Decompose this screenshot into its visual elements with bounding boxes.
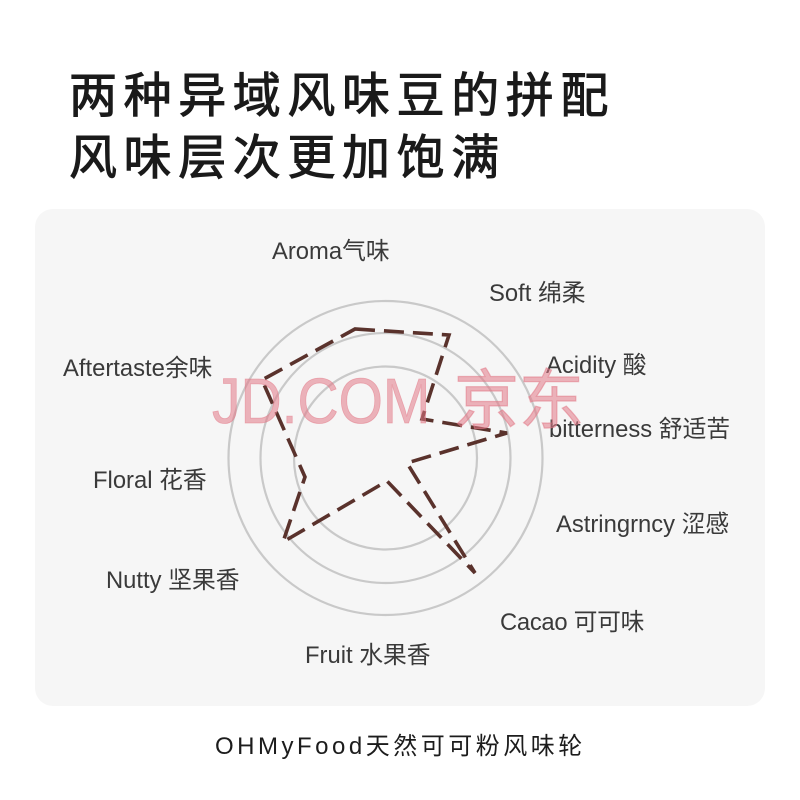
label: Nutty: Nutty 坚果香 [106, 567, 240, 594]
label: Cacao: Cacao 可可味 [500, 609, 644, 636]
label: Acidity: Acidity 酸 [546, 352, 646, 379]
label: Floral: Floral 花香 [93, 467, 207, 494]
title [69, 70, 615, 185]
panel: flavour wheel [35, 209, 765, 706]
watermark: JD.COM [212, 365, 430, 437]
title: 风味层次更加饱满 [69, 132, 506, 185]
watermark: 京东 [454, 364, 584, 437]
concentric rings [228, 301, 542, 615]
label: Aroma: Aroma气味 [272, 238, 390, 265]
label: Soft: Soft 绵柔 [489, 280, 586, 307]
label: bitterness: bitterness 舒适苦 [549, 416, 730, 443]
label: Fruit: Fruit 水果香 [305, 642, 431, 669]
label: Astringrncy: Astringrncy 涩感 [556, 511, 729, 538]
flavour profile dashed line [262, 329, 507, 573]
caption: OHMyFood天然可可粉风味轮 [215, 733, 586, 760]
watermark [212, 364, 584, 437]
label: Aftertaste: Aftertaste余味 [63, 355, 212, 382]
title: 两种异域风味豆的拼配 [69, 70, 615, 123]
